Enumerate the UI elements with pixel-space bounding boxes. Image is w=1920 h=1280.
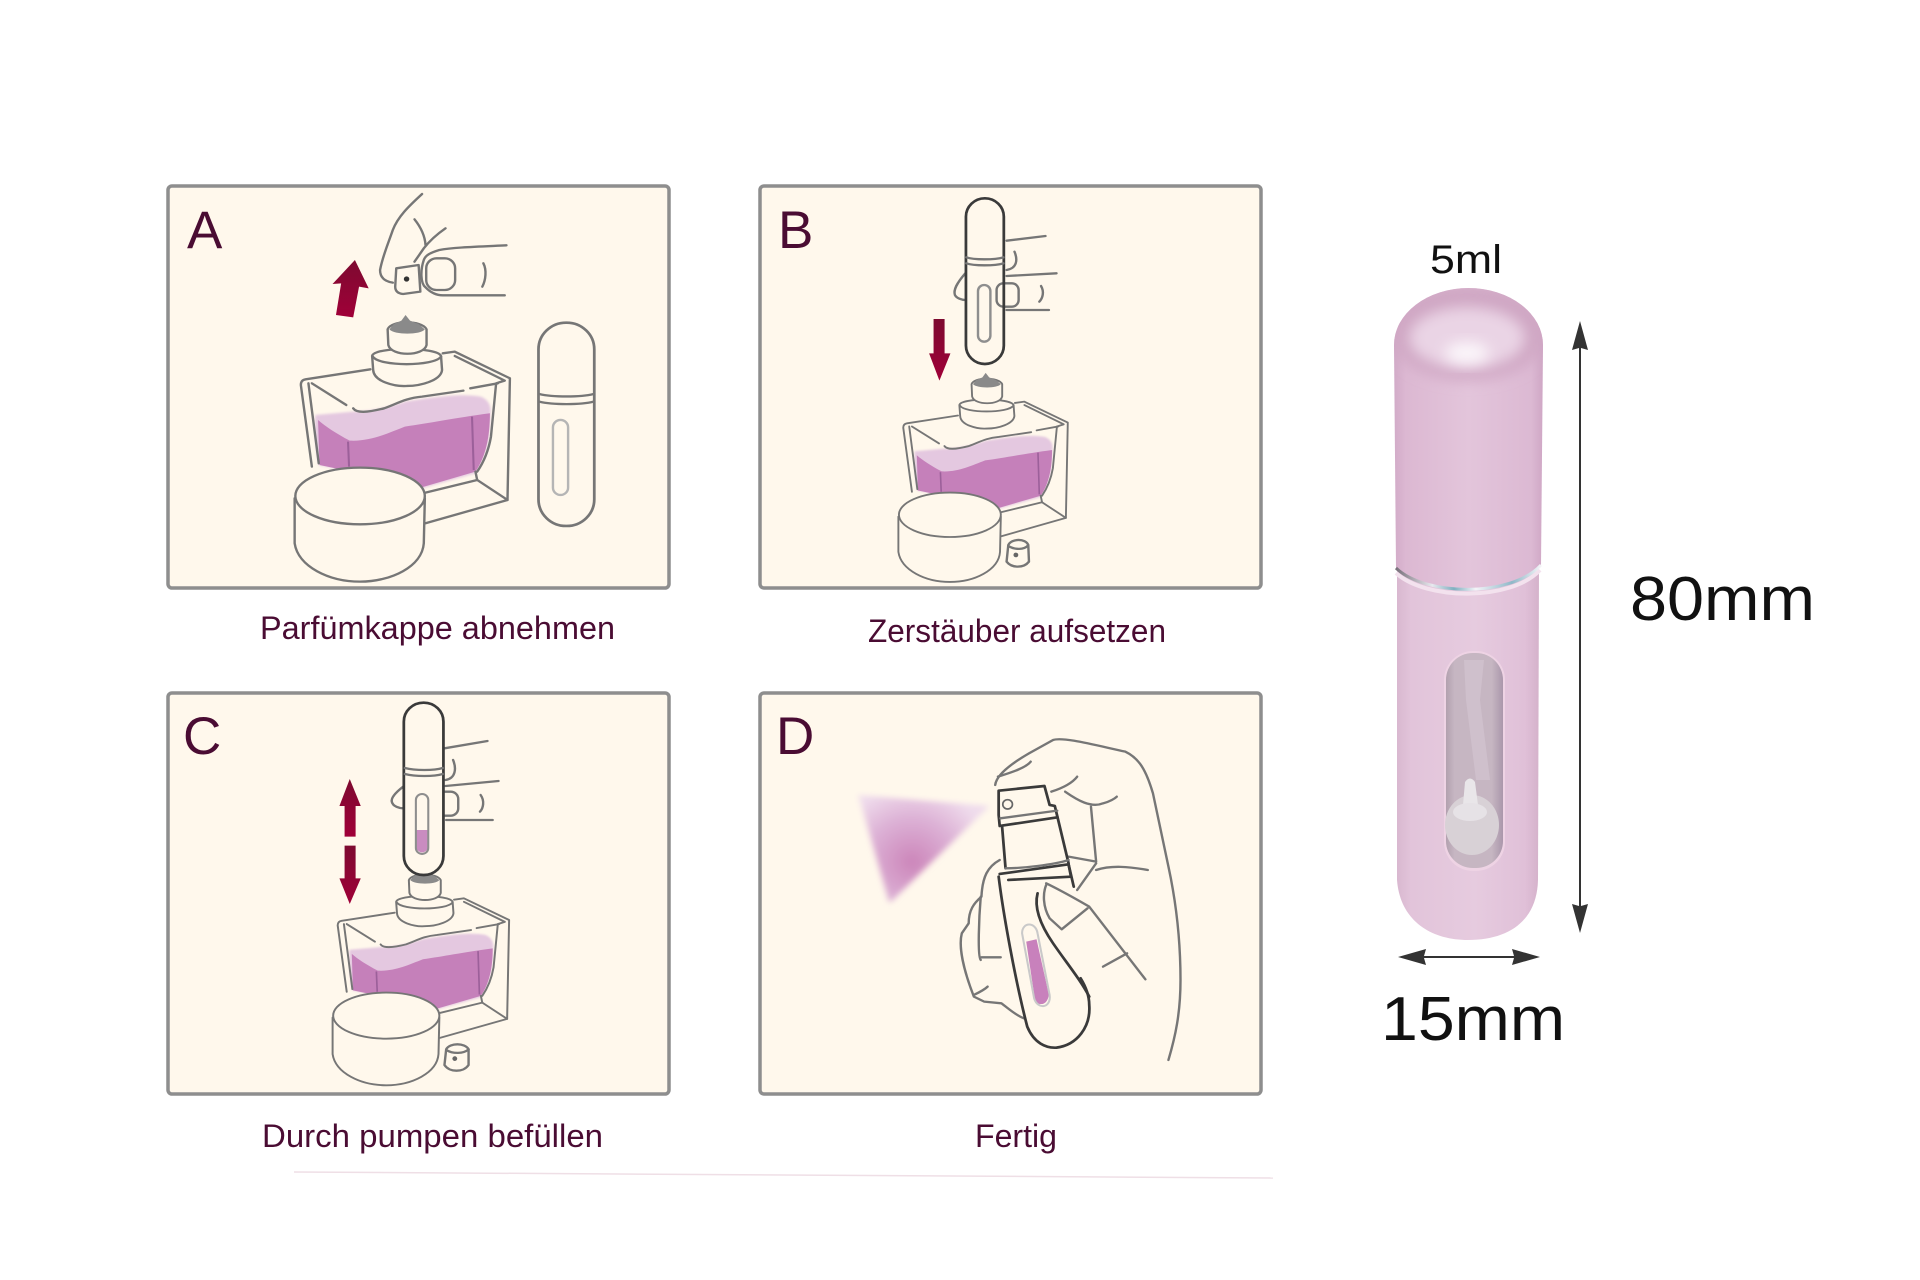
- spray cloud: [858, 795, 989, 903]
- panel A illustration: [295, 194, 594, 582]
- height label: 80mm: [1630, 565, 1815, 634]
- panel C: fill by pumping: [168, 693, 669, 1094]
- panel A letter: A: [187, 201, 223, 260]
- atomizer: [966, 198, 1004, 364]
- caption C: Durch pumpen befüllen: [262, 1118, 603, 1154]
- faint divider line: [294, 1172, 1273, 1178]
- panel B: attach atomizer: [760, 186, 1261, 588]
- panel D illustration: [858, 739, 1180, 1060]
- double arrow: [339, 779, 361, 904]
- perfume bottle with jar: [898, 373, 1068, 582]
- arrow up: [333, 260, 369, 317]
- small cap: [444, 1044, 469, 1071]
- upper cap: [1394, 288, 1543, 589]
- caption A: Parfümkappe abnehmen: [260, 610, 615, 646]
- hand: [961, 739, 1180, 1060]
- panel A frame: [168, 186, 669, 588]
- panel D letter: D: [776, 707, 814, 766]
- caption D: Fertig: [975, 1118, 1057, 1154]
- arrow down: [929, 319, 950, 381]
- hand: [392, 741, 499, 820]
- panel B illustration: [898, 198, 1068, 582]
- atomizer: [999, 786, 1089, 1048]
- panel A: remove perfume cap: [168, 186, 669, 588]
- perfume bottle with jar: [333, 868, 509, 1085]
- perfume bottle with jar: [295, 315, 510, 582]
- width arrow: [1398, 949, 1540, 965]
- atomizer product photo: [1390, 284, 1546, 940]
- window: [1444, 651, 1505, 871]
- panel D frame: [760, 693, 1261, 1094]
- lower body: [1397, 566, 1539, 940]
- panel B letter: B: [778, 201, 813, 260]
- hand: [954, 236, 1057, 310]
- dome shading: [1390, 284, 1546, 380]
- panel D: finished, spray: [760, 693, 1261, 1094]
- capacity label: 5ml: [1430, 238, 1502, 282]
- height arrow: [1572, 321, 1588, 933]
- hand holding cap: [380, 194, 506, 295]
- width label: 15mm: [1381, 985, 1565, 1054]
- panel C illustration: [333, 703, 509, 1085]
- panel C letter: C: [183, 707, 221, 766]
- atomizer: [538, 323, 594, 526]
- panel B frame: [760, 186, 1261, 588]
- caption B: Zerstäuber aufsetzen: [868, 613, 1166, 649]
- atomizer: [404, 703, 443, 875]
- small cap: [1007, 540, 1029, 567]
- metal band: [1396, 565, 1541, 594]
- panel C frame: [168, 693, 669, 1094]
